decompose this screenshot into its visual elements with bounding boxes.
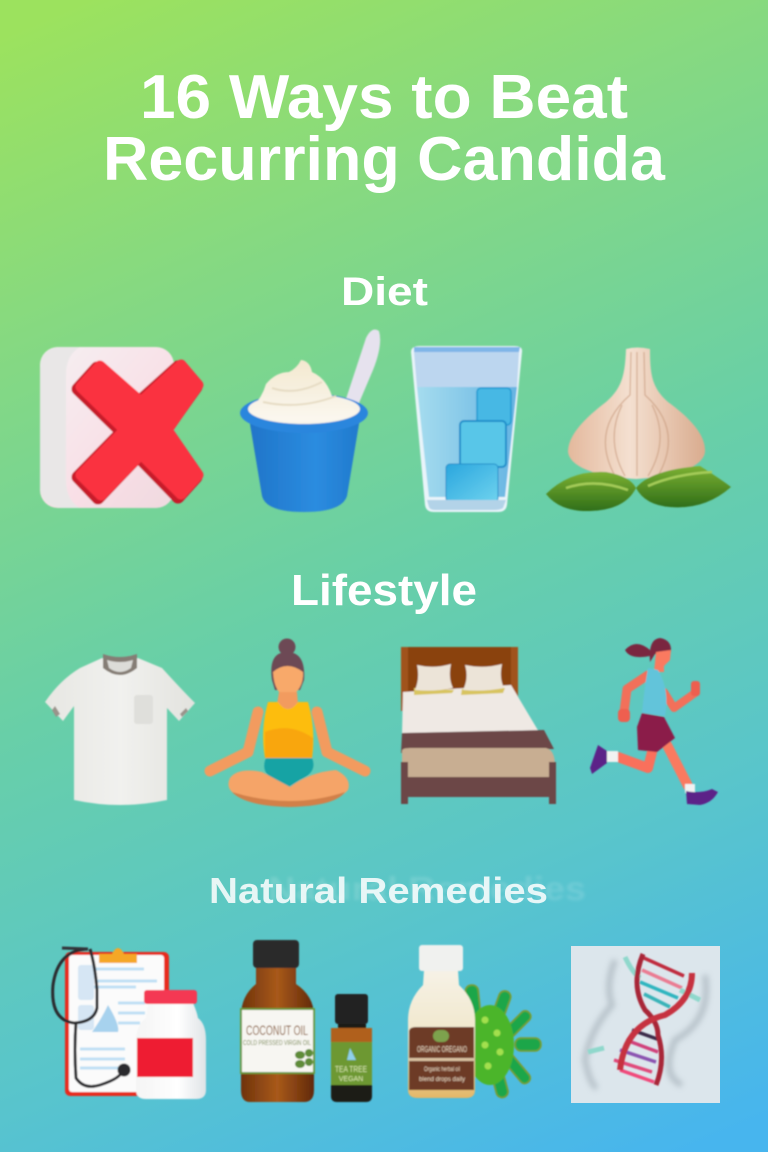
heading: Lifestyle: Lifestyle (291, 566, 477, 615)
icon: coconut oil and tea tree oil bottles: VEGAN (339, 1076, 363, 1083)
icon: bottle with label and green microbe: Organic herbal oil (424, 1067, 460, 1073)
icon: woman running (590, 638, 718, 805)
icon: coconut oil and tea tree oil bottles: COLD PRESSED VIRGIN OIL (243, 1040, 311, 1047)
heading: Natural Remedies: Natural Remedies (209, 870, 548, 911)
heading: Diet: Diet (341, 270, 428, 314)
icon: garlic bulb with leaves (546, 348, 731, 511)
icon: person meditating (210, 638, 365, 807)
title: 16 Ways to Beat (140, 63, 628, 132)
icon: bottle with label and green microbe (408, 945, 541, 1099)
icon: bottle with label and green microbe: blend drops daily (419, 1077, 465, 1083)
icon: t-shirt (45, 654, 195, 805)
icon: bottle with label and green microbe: ORGANIC OREGANO (417, 1045, 467, 1054)
title (103, 63, 666, 194)
icon: bed (401, 647, 556, 804)
icon: coconut oil and tea tree oil bottles (241, 940, 372, 1102)
heading: Natural Remedies: Natural Remedies (268, 870, 586, 907)
title: Recurring Candida (103, 125, 666, 194)
icon: glass of water with ice (411, 346, 522, 512)
icon: DNA double helix on card (571, 946, 720, 1103)
icon: coconut oil and tea tree oil bottles: COCONUT OIL (246, 1022, 308, 1038)
icon: yogurt cup with spoon (240, 330, 380, 512)
icon: soap bar crossed out (40, 347, 198, 508)
icon: clipboard, stethoscope and pill bottle (53, 948, 206, 1099)
icon: coconut oil and tea tree oil bottles: TEA TREE (335, 1065, 367, 1074)
